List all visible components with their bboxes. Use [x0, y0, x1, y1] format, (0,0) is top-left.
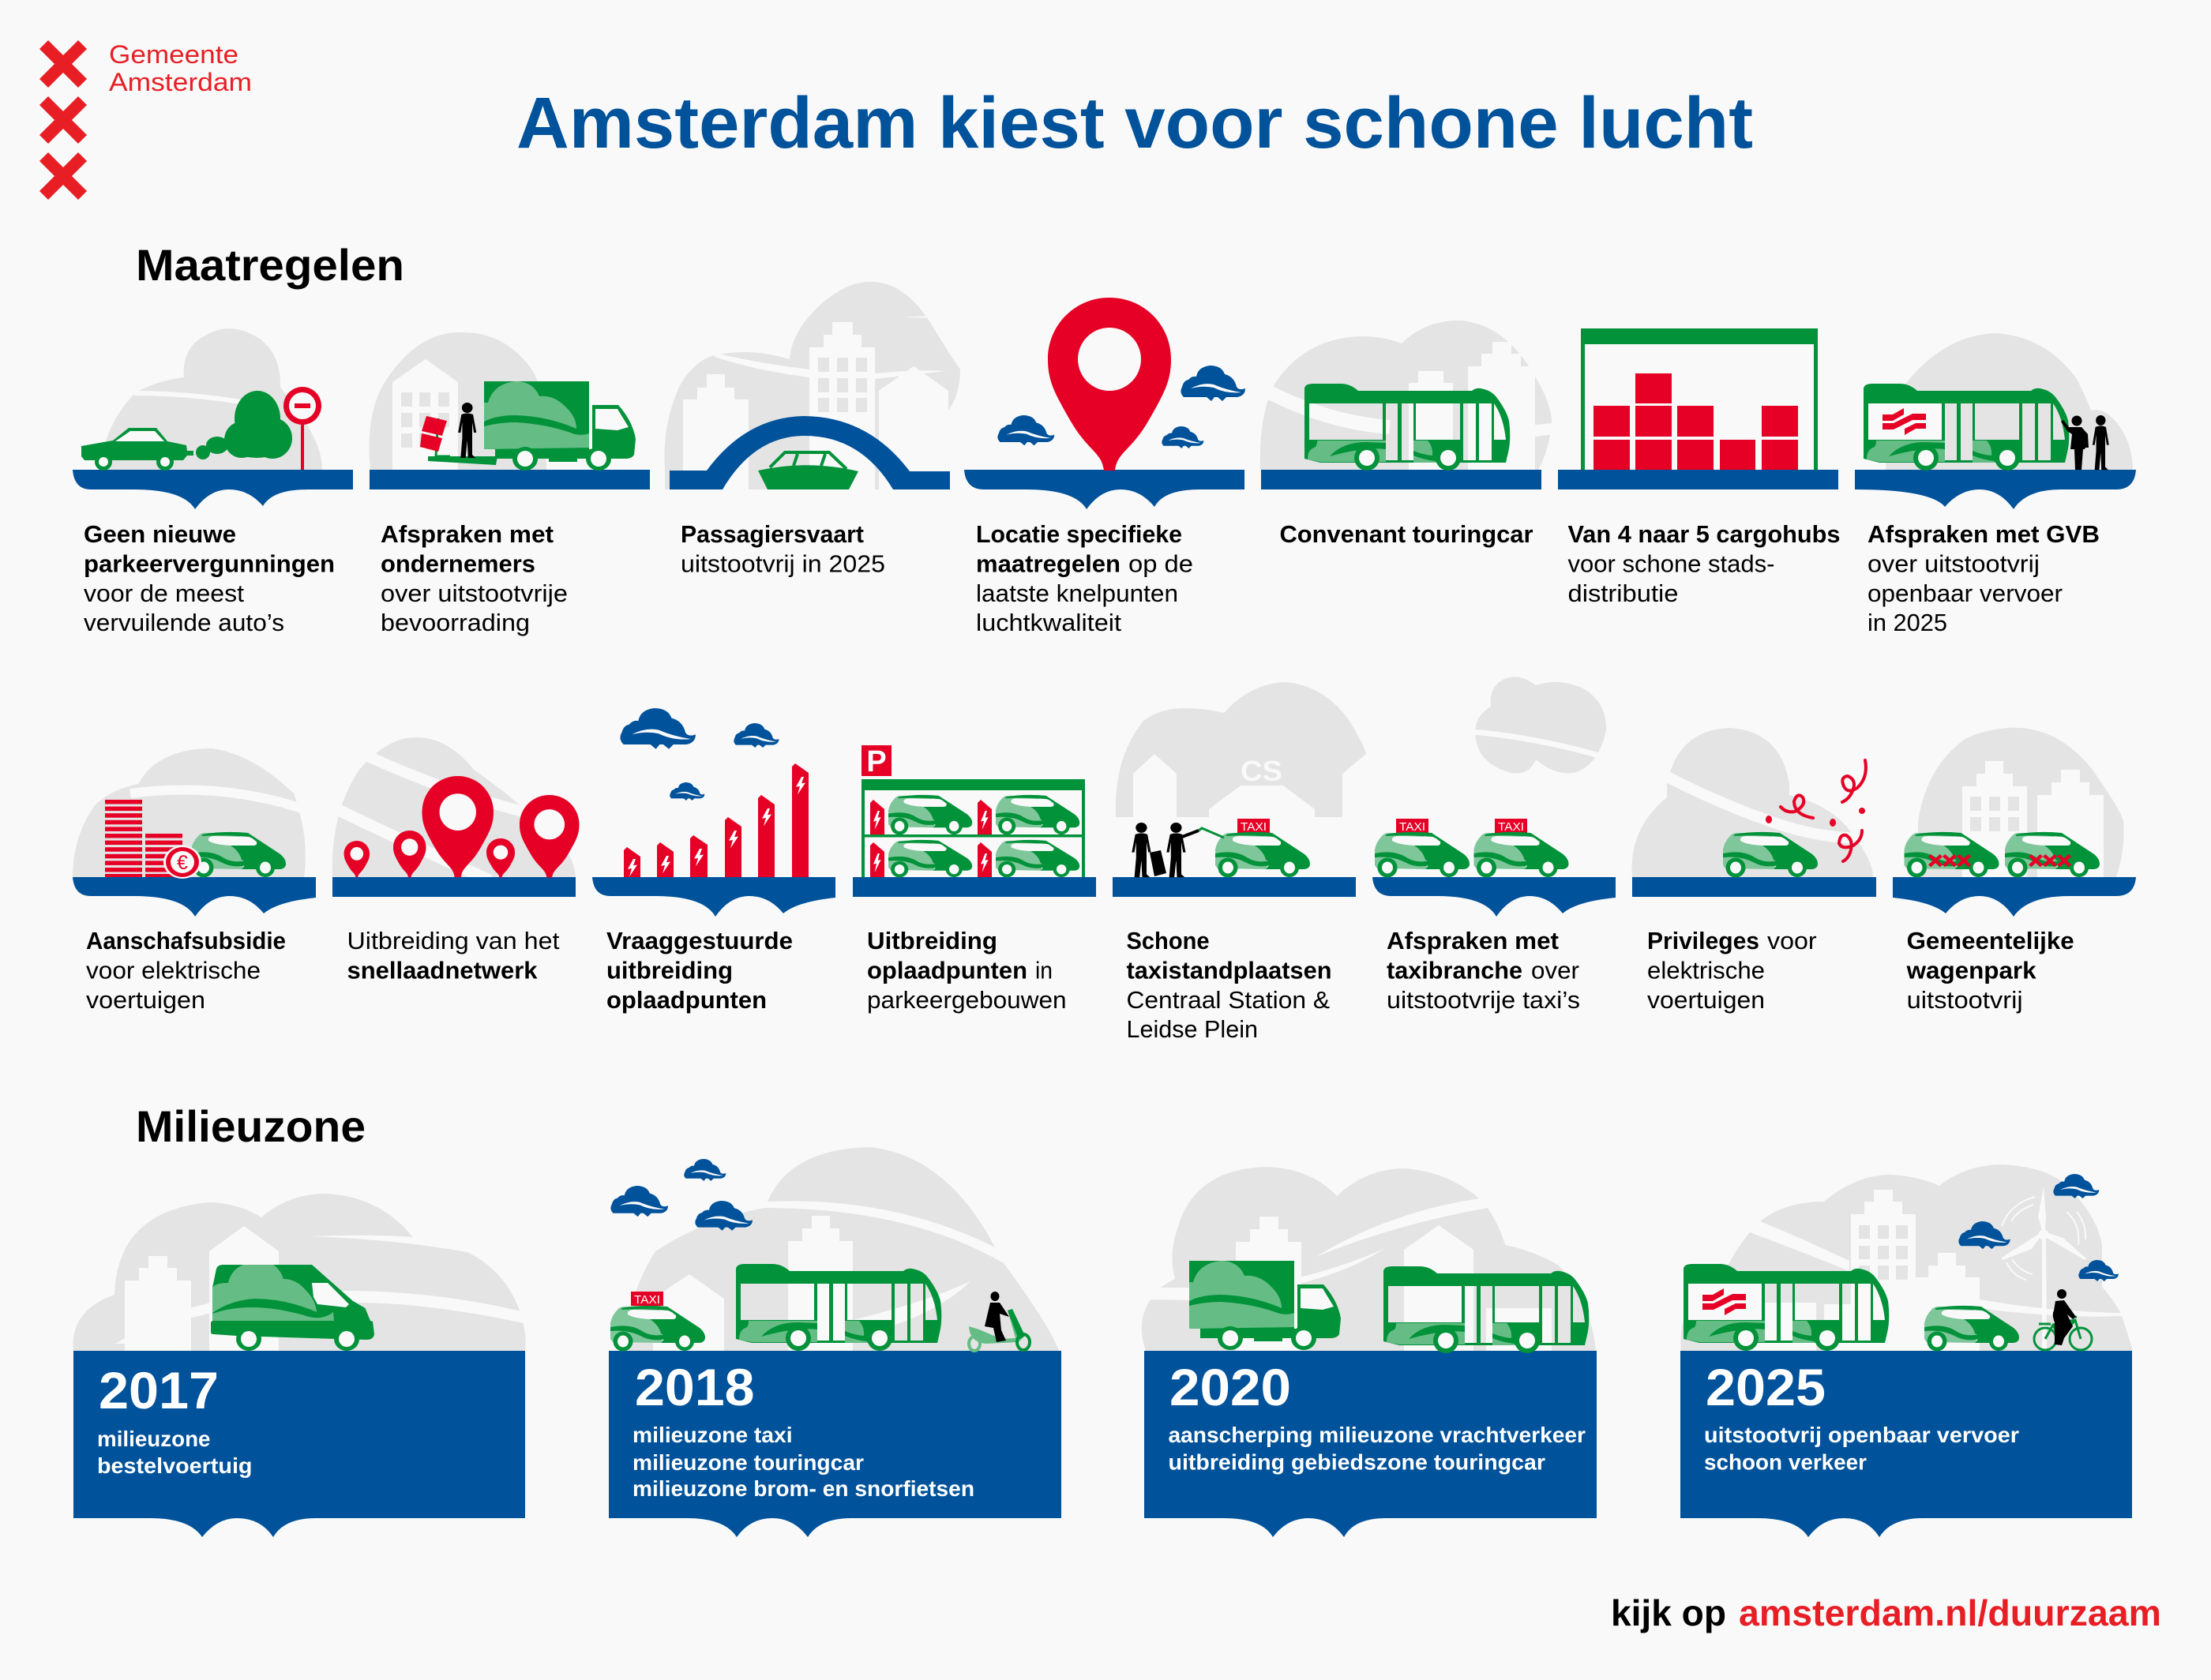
grey city backdrop [1680, 1164, 2133, 1351]
text: uitstootvrije taxi’s [1387, 986, 1580, 1014]
icon: bridge [670, 416, 950, 489]
icon: polluting car [81, 428, 193, 471]
icon: cargo boxes [1593, 373, 1798, 470]
text: taxistandplaatsen [1126, 957, 1331, 984]
text [1647, 927, 1817, 1014]
icon: clouds [1958, 1174, 2119, 1281]
text [86, 927, 286, 1014]
icon: charging pins [344, 776, 580, 878]
icon: two taxis: TAXI [1399, 820, 1425, 834]
text: laatste knelpunten [976, 579, 1178, 607]
text: Locatie specifieke [976, 520, 1182, 548]
text: Convenant touringcar [1279, 520, 1533, 548]
text: Uitbreiding [867, 927, 997, 954]
text: in [1035, 957, 1053, 984]
text [97, 1427, 253, 1478]
text [681, 520, 885, 578]
icon: clouds [997, 366, 1245, 448]
text: ondernemers [381, 549, 535, 578]
building [392, 359, 458, 470]
icon: delivery van [211, 1265, 374, 1351]
icon: cyclist [2034, 1289, 2092, 1350]
year block with bracket [1680, 1351, 2132, 1537]
text: Privileges [1647, 927, 1759, 954]
grey city backdrop [624, 1147, 1059, 1351]
buildings [1962, 761, 2104, 877]
text [606, 927, 793, 1014]
text: wagenpark [1906, 957, 2036, 984]
text: Vraaggestuurde [606, 927, 793, 954]
text: schoon verkeer [1704, 1449, 1867, 1475]
year block with bracket [609, 1351, 1061, 1537]
icon: exhaust smoke [196, 391, 292, 459]
grey cloud backdrop [1475, 677, 1606, 774]
panel: milieuzone 2025 [1680, 1164, 2133, 1537]
panel: oplaadpunten in parkeergebouwen [853, 745, 1096, 1014]
text: Gemeentelijke [1907, 927, 2074, 954]
heading: Milieuzone: Milieuzone [136, 1101, 366, 1151]
text: aanscherping milieuzone vrachtverkeer [1169, 1423, 1586, 1447]
icon: GVB bus [1684, 1264, 1889, 1351]
panel: milieuzone 2017 [73, 1194, 526, 1537]
text [1568, 520, 1840, 607]
text: Passagiersvaart [681, 520, 864, 548]
icon: passengers with suitcase [1132, 823, 1224, 877]
icon: ramp and hand cart with boxes [420, 416, 497, 465]
road [1980, 1299, 2123, 1317]
icon: two taxis: TAXI [1498, 820, 1524, 834]
text: oplaadpunten [606, 986, 767, 1014]
platform [370, 470, 650, 489]
panel: schone taxistandplaatsen [1113, 682, 1366, 1043]
icon: parking garage [862, 779, 1085, 877]
text: over uitstootvrij [1868, 549, 2040, 578]
text [1704, 1423, 2019, 1475]
panel: privileges [1632, 728, 1876, 1014]
text: over uitstootvrije [381, 579, 568, 607]
grey station backdrop [1116, 682, 1366, 817]
panel: afspraken met taxibranche [1372, 677, 1616, 1014]
grey city backdrop [664, 282, 960, 489]
text: oplaadpunten [867, 957, 1027, 984]
icon: confetti [1766, 760, 1866, 861]
text: bestelvoertuig [97, 1453, 253, 1478]
text [381, 520, 568, 636]
text: op de [1128, 549, 1193, 578]
text: parkeergebouwen [867, 986, 1067, 1014]
platform [332, 877, 576, 897]
text [976, 520, 1193, 636]
year block with bracket [73, 1351, 525, 1537]
icon: delivery truck [484, 381, 636, 471]
text: voor elektrische [86, 957, 261, 984]
text: bevoorrading [381, 609, 530, 636]
text [1169, 1423, 1586, 1475]
grey city backdrop [101, 328, 322, 470]
panel: passagiersvaart [664, 282, 960, 578]
icon: electric car [1924, 1306, 2019, 1352]
footer link: kijk op [1611, 1592, 1726, 1633]
footer link: amsterdam.nl/duurzaam [1739, 1592, 2161, 1633]
text: maatregelen [976, 549, 1121, 578]
title: Amsterdam kiest voor schone lucht [516, 83, 1753, 163]
text [1387, 927, 1580, 1014]
icon: clouds [610, 1159, 753, 1231]
text [867, 927, 1067, 1014]
grey city backdrop [370, 332, 546, 470]
text: Aanschafsubsidie [86, 927, 286, 954]
bright panel behind logo window [1868, 403, 1942, 440]
platform [1261, 470, 1541, 489]
grey city backdrop [332, 737, 576, 877]
text [1906, 927, 2074, 1014]
text: over [1531, 957, 1579, 984]
heading: Maatregelen: Maatregelen [136, 240, 404, 290]
panel: aanschafsubsidie [73, 748, 316, 1014]
panel: gemeentelijke wagenpark [1893, 728, 2136, 1014]
text: in 2025 [1868, 609, 1947, 636]
panel: afspraken met ondernemers [370, 332, 650, 636]
logo: Gemeente Amsterdam: Amsterdam [109, 68, 252, 96]
icon: parking sign [862, 745, 892, 778]
text: vervuilende auto’s [84, 609, 284, 636]
panel: vraaggestuurde oplaadpunten [592, 708, 835, 1014]
logo: Gemeente Amsterdam: Gemeente [109, 40, 238, 69]
icon: electric car [191, 832, 286, 878]
text [633, 1423, 974, 1501]
text: parkeervergunningen [84, 549, 335, 578]
buildings [1236, 1217, 1552, 1351]
platform with bracket [1893, 877, 2136, 917]
grey backdrop [1632, 728, 1873, 877]
text: voor [1767, 927, 1817, 954]
year: 2025 [1706, 1358, 1826, 1416]
text: elektrische [1647, 957, 1765, 984]
text: distributie [1568, 579, 1679, 607]
icon: taxi [610, 1292, 705, 1352]
platform [1558, 470, 1838, 489]
text: uitstootvrij [1907, 986, 2023, 1014]
panel: snellaadnetwerk [332, 737, 580, 984]
icon: parked electric cars with chargers [870, 795, 1079, 877]
icon: location pin [1048, 298, 1171, 471]
icon: scooter [969, 1292, 1030, 1351]
icon: touring bus [736, 1264, 941, 1351]
icon: touring bus [1304, 384, 1510, 471]
grey city backdrop [73, 1194, 526, 1351]
icon: parking sign: P [866, 745, 887, 778]
text: milieuzone touringcar [633, 1450, 864, 1475]
grey city backdrop [1142, 1167, 1596, 1351]
logo: Gemeente Amsterdam [39, 40, 252, 200]
icon: clouds [620, 708, 779, 801]
year block with bracket [1144, 1351, 1597, 1537]
grey city backdrop [1260, 321, 1552, 470]
platform [1632, 877, 1876, 897]
platform with bracket [1855, 470, 2136, 509]
panel: afspraken met GVB [1855, 333, 2136, 636]
text: voor de meest [84, 579, 244, 607]
text: Afspraken met [1387, 927, 1559, 954]
platform [853, 877, 1096, 897]
text [1126, 927, 1331, 1043]
text: uitstootvrij openbaar vervoer [1704, 1423, 2019, 1447]
text: voertuigen [86, 986, 205, 1014]
text: voertuigen [1647, 986, 1765, 1014]
text: Centraal Station & [1126, 986, 1330, 1014]
text: milieuzone [97, 1427, 210, 1451]
panel: milieuzone 2020 [1142, 1167, 1597, 1537]
platform with bracket [592, 877, 835, 917]
buildings [683, 322, 948, 489]
icon: euro coin: € [177, 852, 188, 874]
text: uitbreiding gebiedszone touringcar [1169, 1449, 1545, 1475]
text: Afspraken met [381, 520, 554, 548]
buildings [125, 1226, 279, 1351]
icon: taxi: TAXI [634, 1293, 660, 1307]
year: 2017 [99, 1361, 219, 1419]
icon: delivery truck [1189, 1261, 1341, 1350]
text: Van 4 naar 5 cargohubs [1568, 520, 1840, 548]
text: Leidse Plein [1126, 1015, 1258, 1043]
icon: no entry sign [283, 387, 321, 470]
platform with bracket [73, 470, 353, 509]
text [84, 520, 335, 636]
icon: growing charging posts [624, 763, 809, 877]
text: milieuzone brom- en snorfietsen [633, 1476, 974, 1501]
text: Geen nieuwe [84, 520, 236, 548]
icon: passengers [2061, 415, 2109, 470]
icon: two taxis [1375, 819, 1568, 878]
icon: worker [458, 403, 476, 458]
text: openbaar vervoer [1868, 579, 2063, 607]
year: 2020 [1169, 1358, 1291, 1416]
icon: touring bus [1383, 1266, 1589, 1353]
text: voor schone stads- [1568, 549, 1775, 578]
text: luchtkwaliteit [976, 609, 1121, 636]
icon: cargo hub frame [1581, 328, 1818, 470]
icon: GVB bus [1864, 384, 2069, 471]
text: snellaadnetwerk [347, 957, 538, 984]
text: Afspraken met GVB [1868, 520, 2100, 548]
platform [1113, 877, 1356, 897]
text [347, 927, 560, 984]
text: uitbreiding [606, 957, 733, 984]
text: taxibranche [1387, 957, 1522, 984]
year: 2018 [635, 1358, 755, 1416]
station label: CS [1241, 755, 1282, 787]
panel: milieuzone 2018 [609, 1147, 1061, 1537]
icon: municipal cars [1905, 832, 2100, 878]
icon: boat [758, 452, 858, 489]
icon: euro coin [163, 846, 201, 879]
grey city backdrop [1918, 728, 2124, 877]
buildings [653, 1216, 853, 1351]
buildings [1750, 1190, 1980, 1351]
icon: coin stacks [105, 800, 182, 877]
bright panel behind logo window [1688, 1284, 1762, 1320]
icon: taxi [1215, 819, 1310, 878]
panel: cargohubs [1558, 328, 1840, 607]
platform with bracket [73, 877, 316, 917]
panel: locatie specifieke maatregelen [964, 298, 1245, 636]
icon: electric car [1723, 832, 1818, 878]
platform with bracket [1372, 877, 1616, 917]
text: milieuzone taxi [633, 1423, 793, 1447]
text: Uitbreiding van het [347, 927, 560, 954]
platform with bracket [964, 470, 1244, 509]
text: Schone [1126, 927, 1210, 954]
text [1868, 520, 2100, 636]
grey city backdrop [73, 748, 306, 877]
panel: convenant touringcar [1260, 321, 1554, 548]
buildings [1409, 342, 1535, 470]
panel: geen nieuwe parkeervergunningen [73, 328, 353, 636]
icon: wind turbine [2002, 1187, 2086, 1351]
grey city backdrop [1886, 333, 2133, 470]
icon: taxi: TAXI [1241, 820, 1267, 834]
text: uitstootvrij in 2025 [681, 549, 885, 578]
